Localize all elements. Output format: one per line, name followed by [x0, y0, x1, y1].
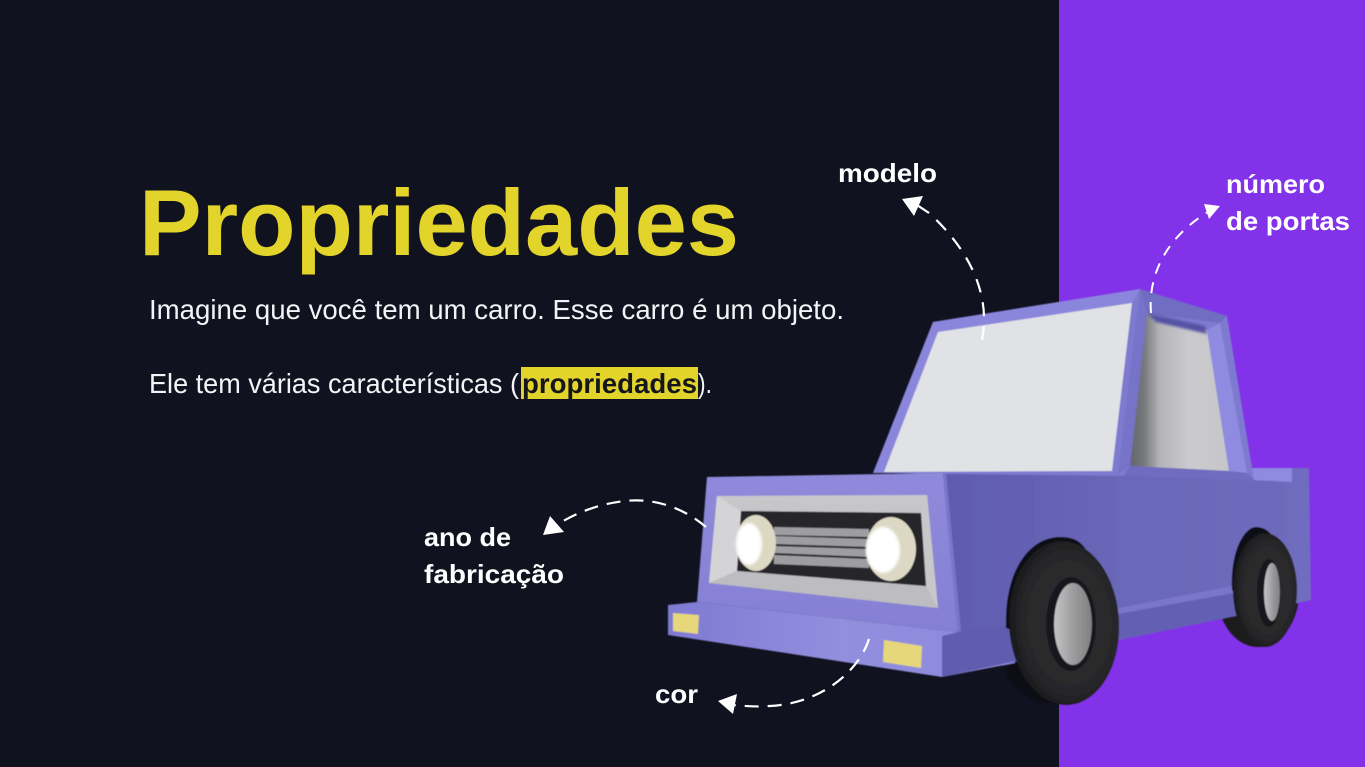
background: dark panel — [0, 0, 1059, 767]
arrow: ano de fabricação — [543, 500, 706, 535]
label: modelo — [838, 158, 984, 340]
label: ano de fabricação: fabricação — [424, 559, 564, 589]
cabin roof edge — [1140, 289, 1227, 323]
text block: intro: Imagine que você tem um carro. Esse carro é um objeto. — [149, 294, 844, 325]
windshield — [884, 303, 1132, 472]
front wheel rim — [1054, 583, 1092, 665]
headlight left — [736, 515, 776, 571]
highlight — [521, 367, 698, 399]
text block: properties sentence: Ele tem várias características ( — [149, 368, 520, 399]
text block: properties sentence: ). — [698, 368, 712, 399]
arrow: cor — [718, 639, 869, 714]
front wheel — [1005, 537, 1123, 708]
rear wheel back tire — [1217, 537, 1299, 647]
fog light left — [673, 613, 699, 634]
title: Propriedades — [139, 170, 739, 275]
body side — [942, 473, 1295, 677]
label: número de portas: de portas — [1226, 206, 1350, 236]
arrow: modelo — [902, 196, 984, 340]
bumper — [668, 602, 1030, 677]
label: número de portas: número — [1226, 169, 1325, 199]
grille recess — [709, 495, 938, 608]
front wheel back tire — [996, 556, 1104, 704]
text block: properties sentence: propriedades — [522, 368, 697, 399]
label: cor: cor — [655, 679, 698, 709]
background: purple panel — [1059, 0, 1365, 767]
black grille panel — [737, 511, 926, 586]
label: ano de fabricação: ano de — [424, 522, 511, 552]
side window — [1118, 289, 1254, 480]
sill — [1118, 590, 1240, 640]
grille slats — [774, 527, 869, 568]
cabin frame — [873, 289, 1254, 480]
text block: properties sentence — [149, 367, 712, 399]
label: ano de fabricação — [424, 500, 706, 589]
car illustration — [668, 289, 1311, 708]
arrow: número de portas — [1151, 204, 1220, 313]
headlight right — [866, 517, 916, 581]
label: modelo: modelo — [838, 158, 937, 188]
front corner highlight — [943, 473, 961, 632]
rear wheel — [1232, 527, 1297, 647]
front face — [697, 473, 958, 632]
fog light right — [883, 640, 922, 668]
rear wheel rim — [1264, 563, 1280, 621]
truck bed — [1250, 468, 1311, 604]
label: número de portas — [1151, 169, 1350, 313]
label: cor — [655, 639, 869, 714]
